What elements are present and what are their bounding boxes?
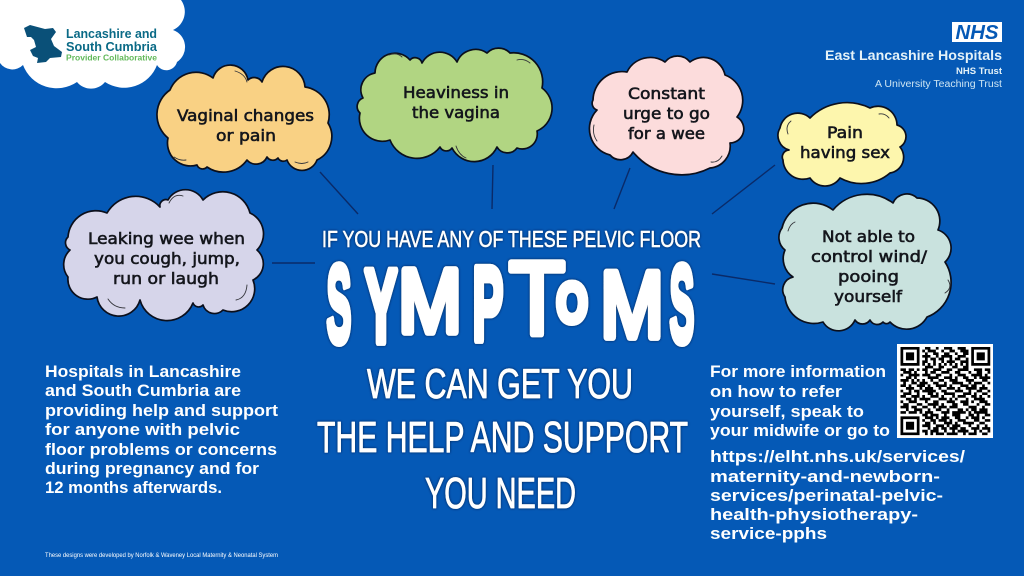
heading: SYMPTOMS: S	[327, 244, 351, 366]
trust subtitle: NHS Trust	[956, 66, 1003, 77]
credit line: These designs were developed by Norfolk & Waveney Local Maternity & Neonatal System	[45, 553, 278, 559]
text block: left information: and South Cumbria are	[45, 381, 241, 400]
text: having sex	[800, 143, 890, 162]
text	[403, 83, 509, 122]
logo text: Provider Collaborative	[66, 54, 158, 62]
text: yourself	[834, 287, 902, 306]
heading: SYMPTOMS	[327, 240, 694, 366]
heading: we can get you: THE HELP AND SUPPORT	[317, 413, 688, 462]
text: Pain	[827, 123, 863, 142]
heading: we can get you: WE CAN GET YOU	[367, 360, 633, 407]
heading: SYMPTOMS: O	[556, 273, 588, 335]
trust name: East Lancashire Hospitals	[825, 47, 1002, 63]
text	[88, 229, 245, 288]
link text: services/perinatal-pelvic-	[710, 486, 943, 505]
link text: https://elht.nhs.uk/services/	[710, 447, 965, 466]
text	[811, 227, 928, 306]
cloud: not able to control	[779, 194, 951, 331]
link text: service-pphs	[710, 524, 827, 543]
text block: referral information: on how to refer	[710, 382, 842, 401]
text: Leaking wee when	[88, 229, 245, 248]
text block: left information: for anyone with pelvic	[45, 420, 240, 439]
logo text: Lancashire and	[66, 27, 157, 41]
text: Heaviness in	[403, 83, 509, 102]
text block: left information: floor problems or concerns	[45, 440, 277, 459]
text block: left information: during pregnancy and for	[45, 459, 259, 478]
link text: maternity-and-newborn-	[710, 467, 940, 486]
text: or pain	[216, 126, 276, 145]
QR code	[897, 344, 993, 438]
link text	[710, 447, 965, 543]
icon: NHS lozenge	[952, 22, 1002, 42]
heading: SYMPTOMS: P	[473, 247, 503, 363]
heading: SYMPTOMS: Y	[365, 249, 397, 365]
cloud: leaking wee	[64, 190, 264, 321]
text block: referral information	[710, 362, 890, 440]
text: you cough, jump,	[94, 249, 240, 268]
heading: SYMPTOMS: S	[670, 244, 694, 366]
text: run or laugh	[113, 269, 219, 288]
heading: we can get you: YOU NEED	[425, 469, 576, 518]
text block: referral information: your midwife or go to	[710, 421, 890, 440]
icon: region map	[24, 25, 62, 63]
text block: referral information: yourself, speak to	[710, 402, 864, 421]
heading: SYMPTOMS: M	[600, 253, 664, 358]
cloud: pain having sex	[778, 103, 906, 186]
text	[623, 84, 710, 143]
logo text: South Cumbria	[66, 40, 158, 54]
cloud: heaviness	[357, 48, 552, 162]
text: the vagina	[412, 103, 500, 122]
text	[177, 106, 314, 145]
heading: we can get you	[317, 360, 688, 518]
NHS trust logo: NHS	[956, 22, 999, 44]
text block: left information: providing help and support	[45, 401, 278, 420]
cloud: constant urge	[589, 56, 744, 175]
cloud: vaginal changes	[157, 65, 332, 172]
heading: SYMPTOMS: M	[398, 251, 462, 351]
text: urge to go	[623, 104, 710, 123]
logo text	[66, 27, 158, 62]
text: Not able to	[822, 227, 915, 246]
text: Constant	[628, 84, 705, 103]
text block: referral information: For more information	[710, 362, 886, 381]
text block: left information: 12 months afterwards.	[45, 478, 222, 497]
trust strapline: A University Teaching Trust	[875, 79, 1002, 90]
heading: SYMPTOMS: T	[509, 240, 565, 356]
text: control wind/	[811, 247, 928, 266]
connector lines	[272, 165, 775, 284]
link text: health-physiotherapy-	[710, 505, 918, 524]
text	[800, 123, 890, 162]
NHS trust logo	[825, 22, 1003, 90]
text: for a wee	[628, 124, 705, 143]
text block: left information: Hospitals in Lancashire	[45, 362, 241, 381]
text: pooing	[838, 267, 899, 286]
heading: intro line: IF YOU HAVE ANY OF THESE PELVIC FLOOR	[322, 226, 701, 252]
logo panel: white cloud	[0, 0, 185, 89]
text: Vaginal changes	[177, 106, 314, 125]
text block: left information	[45, 362, 278, 497]
